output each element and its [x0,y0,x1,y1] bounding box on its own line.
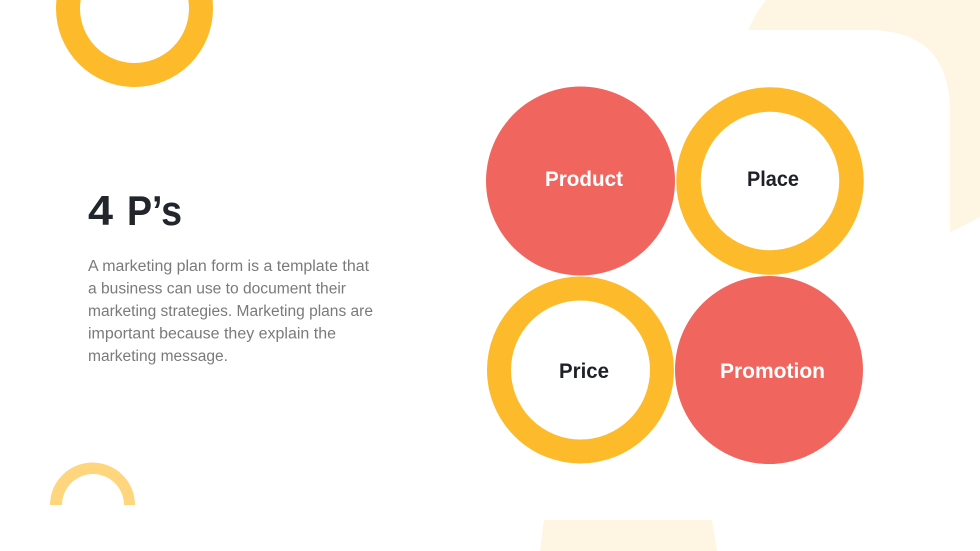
text block: description: marketing message. [88,348,228,365]
circle: Price: Price [559,360,609,383]
circle: Promotion [675,276,863,464]
decorative arc: bottom left [50,462,135,505]
text block: description [88,258,373,365]
title [88,187,182,234]
title: P’s [127,187,182,234]
title: 4 [88,187,114,234]
text block: description: marketing strategies. Marketing plans are [88,303,373,320]
circle: Place [688,100,852,262]
circle: Promotion: Promotion [720,360,825,383]
circle: Price [499,288,662,452]
decorative ring: top left [68,0,201,75]
circle: Place: Place [747,168,799,191]
circle: Product: Product [545,168,623,191]
text block: description: important because they explain the [88,326,336,342]
text block: description: A marketing plan form is a template that [88,258,370,275]
circle: Product [486,86,675,276]
decorative shape: top right cream corner [748,0,980,232]
decorative shape: bottom cream trapezoid [540,520,717,551]
text block: description: a business can use to document their [88,280,346,298]
